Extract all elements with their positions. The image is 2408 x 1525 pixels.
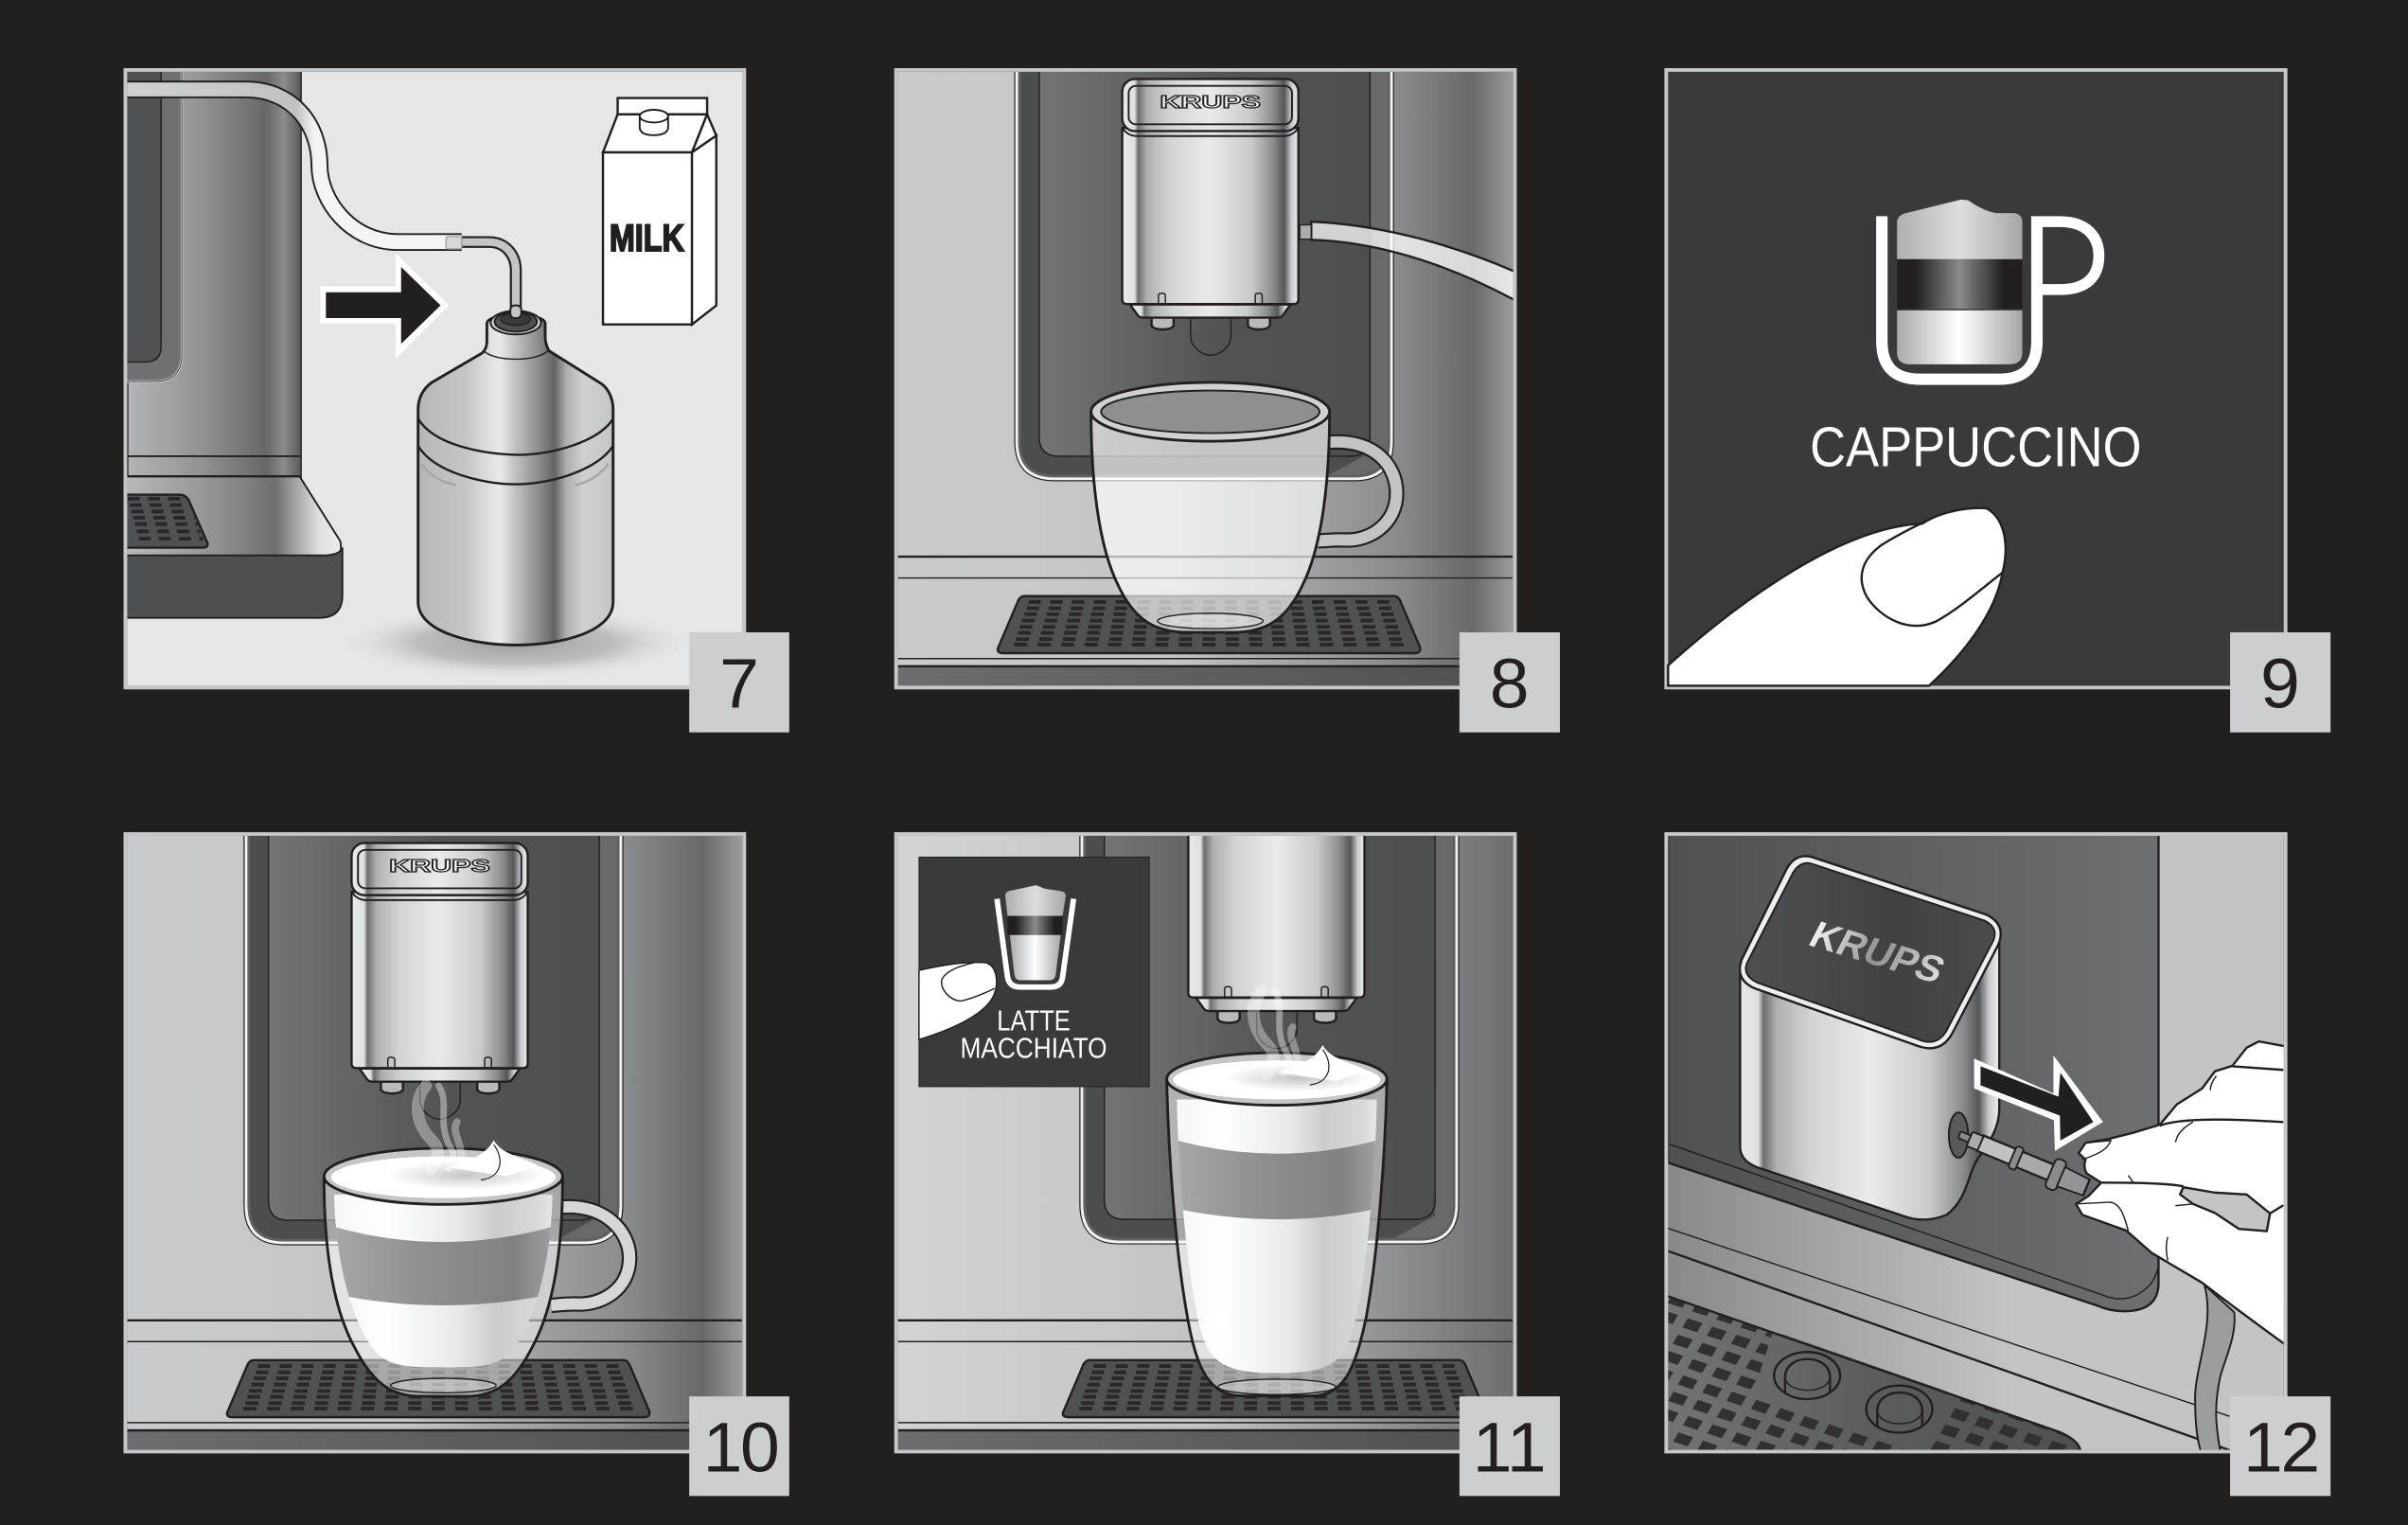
coffee spout [1123, 79, 1299, 355]
badge: step 7: 7 [719, 644, 759, 722]
panel: step 9 select cappuccino [1666, 70, 2330, 733]
badge: step 8: 8 [1490, 644, 1530, 722]
milk nozzle [1949, 1112, 2093, 1201]
panel: step 7 attach milk container [122, 65, 789, 733]
counter [1668, 832, 2284, 1452]
panel: step 8 place cup under spout [894, 65, 1560, 733]
milk carton [603, 98, 717, 325]
drip tray with buttons [1668, 1296, 2080, 1452]
badge: step 11: 11 [1473, 1408, 1547, 1486]
arrow [320, 254, 449, 359]
label: cappuccino: CAPPUCCINO [1810, 416, 2141, 478]
badge: step 9: 9 [2260, 644, 2300, 722]
badge: step 12 [2230, 1396, 2330, 1496]
hand holding nozzle [2076, 1041, 2290, 1347]
badge: step 10: 10 [703, 1408, 777, 1486]
coffee spout [351, 843, 528, 1119]
cappuccino cup [324, 1086, 629, 1396]
coffee spout: KRUPS [389, 856, 490, 876]
coffee spout [1187, 836, 1366, 1049]
badge: step 8 [1460, 632, 1560, 733]
counter lines [898, 1321, 1514, 1451]
label: latte macchiato [962, 1011, 1106, 1058]
milk tube [1300, 222, 1517, 302]
icon: finger [1668, 508, 2006, 685]
icon: cappuccino cup [1882, 200, 2098, 380]
panel: step 11 latte macchiato in glass [894, 772, 1560, 1496]
label: latte macchiato: MACCHIATO [961, 1032, 1107, 1064]
drip tray [1063, 1360, 1485, 1417]
label: latte macchiato: LATTE [997, 1004, 1071, 1037]
badge: step 9 [2230, 632, 2330, 733]
drip tray [227, 1360, 649, 1417]
milk tube [122, 89, 516, 318]
panel: step 12 remove milk nozzle [1664, 832, 2330, 1496]
drip tray [998, 596, 1420, 653]
badge: step 10 [689, 1396, 789, 1496]
coffee spout: KRUPS [1160, 92, 1261, 112]
icon: latte glass [997, 885, 1073, 987]
milk container [418, 306, 613, 645]
milk tube [2195, 1285, 2235, 1452]
coffee spout angled [1740, 856, 2001, 1219]
milk carton: MILK [610, 216, 684, 259]
counter lines [898, 557, 1514, 686]
empty cup [1091, 382, 1396, 632]
panel: step 10 cappuccino in cup [124, 829, 789, 1496]
shadow under container [372, 620, 659, 672]
badge: step 7 [689, 632, 789, 733]
counter lines [127, 1321, 742, 1451]
latte glass [1167, 991, 1387, 1396]
arrow [1974, 1055, 2103, 1151]
badge: step 12: 12 [2243, 1408, 2318, 1486]
machine side view [122, 65, 343, 618]
coffee spout angled: KRUPS [1803, 913, 1952, 991]
icon: finger [919, 963, 997, 1039]
badge: step 11 [1460, 1396, 1560, 1496]
inset: latte macchiato selection [919, 857, 1149, 1087]
